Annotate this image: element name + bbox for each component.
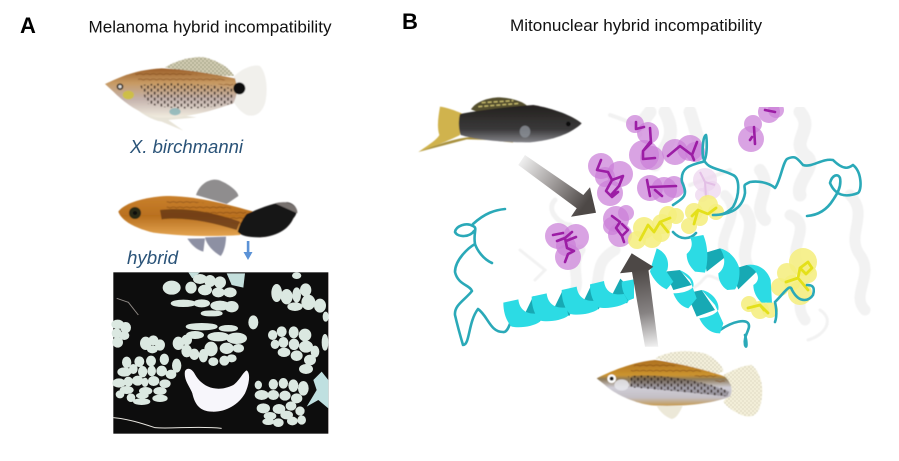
ghost protein: pale background helices [520, 112, 865, 340]
magenta residue sticks [553, 110, 775, 262]
species label: hybrid: hybrid [127, 247, 179, 268]
faded residue sticks [700, 172, 715, 197]
cyan helix 1 [503, 279, 634, 327]
arrow: from parental fish into protein [518, 155, 596, 217]
yellow residue sticks [640, 208, 812, 313]
arrow: from second fish into protein [620, 253, 658, 347]
protein structure [455, 101, 865, 347]
species label: X. birchmanni: X. birchmanni [129, 136, 244, 157]
yellow residue spheres [628, 195, 817, 319]
cyan coil loops [455, 135, 861, 347]
cyan helices 2 and 3 [650, 235, 772, 333]
micrograph: melanoma tissue section [112, 272, 328, 434]
magenta residue spheres [545, 101, 784, 270]
pale patches and crescent [113, 272, 328, 428]
fish: dark swordtail [418, 97, 582, 152]
faded magenta residue [693, 168, 721, 202]
heading: melanoma hybrid incompatibility: Melanoma hybrid incompatibility [88, 18, 332, 36]
fish: X. birchmanni [105, 57, 267, 131]
heading: mitonuclear hybrid incompatibility: Mitonuclear hybrid incompatibility [510, 16, 762, 35]
panel label B: B [402, 9, 418, 34]
melanocyte cell clusters [112, 273, 328, 426]
arrow: down to section [244, 241, 252, 260]
fish: hybrid [118, 180, 297, 256]
fish: orange spotted platyfish [597, 351, 762, 419]
panel label A: A [20, 13, 36, 38]
